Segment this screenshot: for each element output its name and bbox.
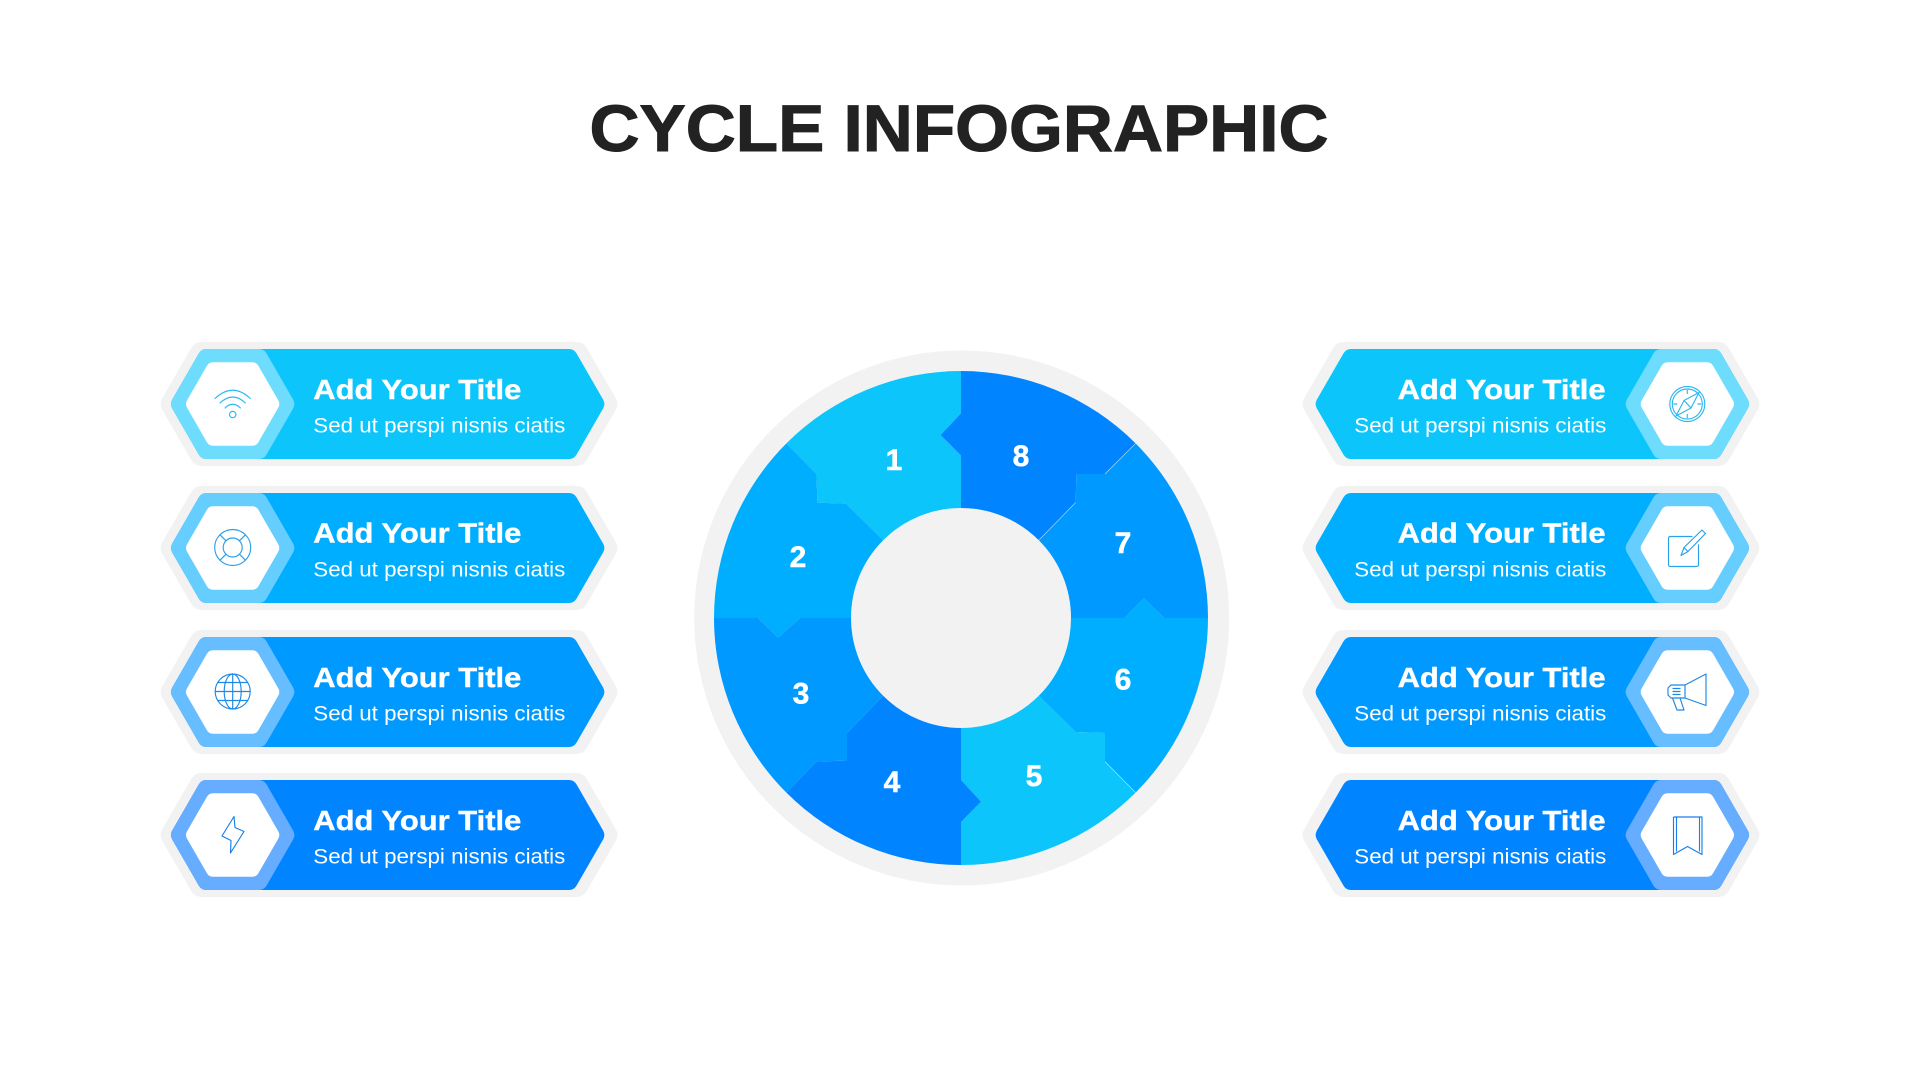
card body xyxy=(180,358,595,450)
icon plate xyxy=(193,657,272,727)
card title: Add Your Title xyxy=(1398,374,1606,405)
card outline xyxy=(173,785,605,885)
panel: left card 2 xyxy=(173,498,605,598)
icon plate xyxy=(1648,369,1727,439)
card body xyxy=(1325,502,1740,594)
cycle diagram xyxy=(694,350,1229,886)
card text: Sed ut perspi nisnis ciatis xyxy=(313,702,565,726)
card outline xyxy=(173,642,605,742)
card body xyxy=(1325,646,1740,738)
icon plate xyxy=(193,369,272,439)
segment 7 xyxy=(1039,443,1208,618)
icon: megaphone xyxy=(1668,674,1706,710)
segment 8 xyxy=(941,371,1136,540)
segment 5 xyxy=(961,696,1136,865)
icon plate xyxy=(193,800,272,870)
icon rim xyxy=(180,502,285,594)
card text: Sed ut perspi nisnis ciatis xyxy=(313,846,565,868)
card outline xyxy=(1315,642,1747,742)
card title: Add Your Title xyxy=(1398,662,1606,693)
icon: edit note xyxy=(1668,530,1706,566)
card title: Add Your Title xyxy=(313,805,521,836)
card text: Sed ut perspi nisnis ciatis xyxy=(313,558,565,582)
icon rim xyxy=(1635,646,1740,738)
icon rim xyxy=(180,646,285,738)
icon plate xyxy=(1648,657,1727,727)
card text: Sed ut perspi nisnis ciatis xyxy=(313,414,565,438)
icon: bookmark xyxy=(1674,817,1702,854)
icon: wifi xyxy=(215,390,250,418)
segment 2 xyxy=(714,443,883,638)
icon rim xyxy=(180,789,285,881)
card outline xyxy=(173,354,605,454)
number 2: 2 xyxy=(790,541,806,574)
number 5: 5 xyxy=(1026,760,1042,793)
number 3: 3 xyxy=(793,678,809,710)
icon plate xyxy=(193,513,272,583)
card title: Add Your Title xyxy=(313,374,521,405)
segment 1 xyxy=(786,371,961,540)
panel: right card 4 xyxy=(1315,785,1747,885)
card text: Sed ut perspi nisnis ciatis xyxy=(1354,846,1606,868)
icon plate xyxy=(1648,513,1727,583)
number 1: 1 xyxy=(886,444,902,477)
icon rim xyxy=(1635,502,1740,594)
icon rim xyxy=(1635,789,1740,881)
icon: life ring xyxy=(215,530,251,566)
panel: left card 1 xyxy=(173,354,605,454)
icon rim xyxy=(1635,358,1740,450)
icon plate xyxy=(1648,800,1727,870)
title: CYCLE INFOGRAPHIC xyxy=(590,92,1328,165)
outer ring xyxy=(694,350,1229,886)
card text: Sed ut perspi nisnis ciatis xyxy=(1354,558,1606,582)
panel: left card 4 xyxy=(173,785,605,885)
card title: Add Your Title xyxy=(313,518,521,549)
number 8: 8 xyxy=(1013,440,1029,473)
number 7: 7 xyxy=(1115,527,1131,560)
card text: Sed ut perspi nisnis ciatis xyxy=(1354,702,1606,726)
icon: globe xyxy=(215,674,250,709)
segment 3 xyxy=(714,618,883,793)
panel: right card 2 xyxy=(1315,498,1747,598)
card text: Sed ut perspi nisnis ciatis xyxy=(1354,414,1606,438)
card body xyxy=(180,789,595,881)
card title: Add Your Title xyxy=(1398,805,1606,836)
card outline xyxy=(1315,785,1747,885)
card outline xyxy=(1315,354,1747,454)
card body xyxy=(1325,789,1740,881)
card body xyxy=(180,646,595,738)
card outline xyxy=(1315,498,1747,598)
icon: compass xyxy=(1670,386,1705,422)
number 6: 6 xyxy=(1115,664,1131,696)
panel: right card 3 xyxy=(1315,642,1747,742)
segment 4 xyxy=(786,696,981,865)
number 4: 4 xyxy=(884,766,901,799)
segment 6 xyxy=(1039,598,1208,793)
card title: Add Your Title xyxy=(1398,518,1606,549)
panel: left card 3 xyxy=(173,642,605,742)
card outline xyxy=(173,498,605,598)
card body xyxy=(180,502,595,594)
icon rim xyxy=(180,358,285,450)
card title: Add Your Title xyxy=(313,662,521,693)
panel: right card 1 xyxy=(1315,354,1747,454)
icon: lightning bolt xyxy=(222,816,244,853)
center circle xyxy=(852,509,1071,727)
card body xyxy=(1325,358,1740,450)
